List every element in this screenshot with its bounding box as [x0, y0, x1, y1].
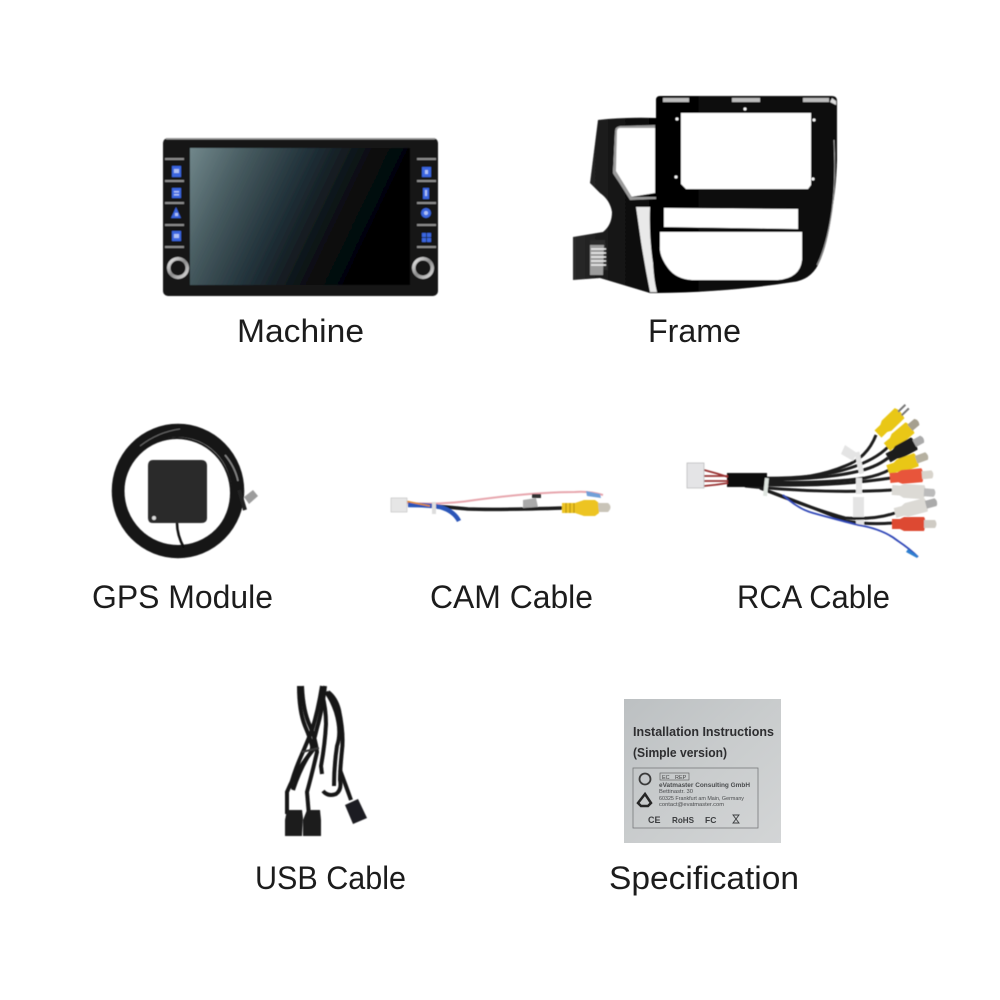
yellow RCA plug — [562, 500, 599, 516]
certification marks: CE — [648, 815, 661, 825]
cable tie — [763, 478, 769, 496]
label: RCA Cable: RCA Cable — [737, 579, 890, 615]
plug 6 white — [892, 483, 936, 500]
address text: eVatmaster Consulting GmbH — [659, 782, 750, 789]
antenna block — [148, 460, 207, 523]
sheet subtitle: (Simple version) — [633, 746, 727, 760]
address text — [659, 782, 750, 808]
instruction sheet — [624, 699, 781, 843]
USB cable photo — [285, 686, 367, 836]
address text: contact@evatmaster.com — [659, 802, 724, 808]
certification marks: RoHS — [672, 815, 694, 825]
plug 2 yellow — [883, 416, 923, 452]
white labels — [841, 445, 864, 526]
certification marks — [648, 815, 739, 825]
compliance box — [633, 768, 758, 828]
blue wire — [783, 495, 918, 557]
left USB plug — [285, 810, 303, 836]
label: GPS Module: GPS Module — [92, 579, 273, 615]
icon: recycle — [638, 794, 651, 806]
blue button icons — [171, 166, 431, 242]
sheet title: Installation Instructions — [633, 725, 774, 739]
side button dividers — [165, 158, 436, 248]
right knob — [412, 257, 434, 279]
trunk — [727, 473, 767, 487]
EC REP mark: REP — [675, 775, 687, 781]
right USB plug — [345, 799, 367, 824]
clip teeth — [590, 240, 608, 270]
panel: RCA cable — [687, 401, 939, 615]
plug 1 yellow — [873, 401, 912, 439]
address text: Bettinastr. 30 — [659, 789, 693, 795]
white connector — [391, 498, 407, 512]
mounting holes — [674, 108, 816, 180]
black wire — [408, 504, 563, 509]
head unit photo — [163, 138, 438, 296]
panel: frame — [573, 96, 837, 349]
coiled cable — [113, 425, 243, 557]
GPS antenna photo — [113, 425, 258, 557]
plug 3 black — [885, 432, 927, 464]
white openings — [681, 113, 811, 189]
white connector — [687, 463, 704, 488]
cable tie left — [302, 748, 319, 752]
label: Specification: Specification — [609, 860, 799, 896]
left knob — [167, 257, 189, 279]
label: CAM Cable: CAM Cable — [430, 579, 593, 615]
dash frame photo — [573, 96, 837, 293]
plug 7 white — [893, 495, 939, 520]
certification marks: FC — [705, 815, 716, 825]
reflective strips — [636, 207, 657, 292]
plug 4 yellow — [886, 449, 930, 477]
panel: machine — [163, 138, 438, 349]
black wire fan — [745, 435, 895, 524]
plug 8 red — [892, 517, 936, 531]
panel: GPS module — [92, 425, 273, 615]
RCA harness photo — [687, 401, 939, 558]
icon: manufacturer mark — [640, 774, 650, 784]
screen — [190, 148, 410, 285]
panel: specification — [609, 699, 799, 896]
label: Frame: Frame — [648, 313, 741, 349]
EC REP mark: EC — [662, 775, 670, 781]
tie — [432, 502, 436, 514]
pink wire — [405, 492, 603, 504]
white tag — [523, 498, 538, 508]
blue pin — [586, 491, 601, 498]
middle USB plug — [303, 810, 321, 836]
address text: 60325 Frankfurt am Main, Germany — [659, 796, 744, 802]
panel: USB cable — [255, 686, 406, 896]
plug 5 red — [889, 467, 934, 485]
blue wire — [408, 505, 459, 521]
label: Machine: Machine — [237, 313, 364, 349]
EC REP mark — [660, 773, 689, 781]
panel: CAM cable — [391, 491, 610, 615]
antenna lead — [177, 523, 184, 548]
connector plug — [244, 490, 258, 504]
label: USB Cable: USB Cable — [255, 860, 406, 896]
camera cable photo — [391, 491, 610, 521]
